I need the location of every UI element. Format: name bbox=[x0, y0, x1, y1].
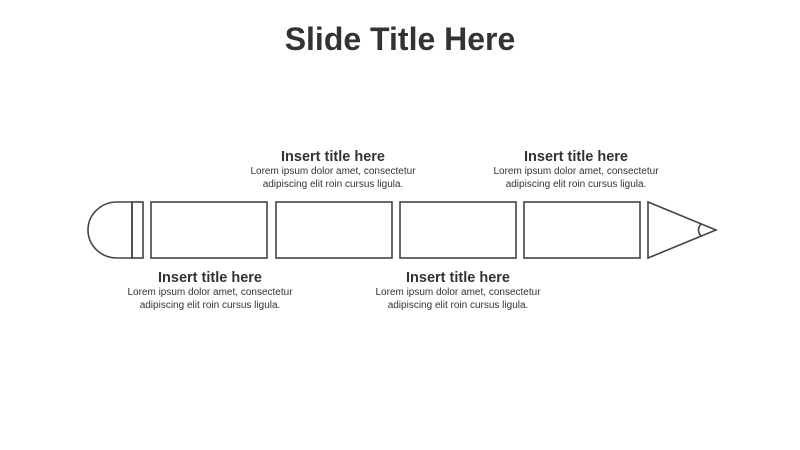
callout: top 2: Lorem ipsum dolor amet, consectetur bbox=[493, 166, 659, 177]
pencil body segments bbox=[151, 202, 640, 258]
callout: bottom 2: adipiscing elit roin cursus ligula. bbox=[388, 300, 528, 310]
callout: bottom 2: Insert title here bbox=[406, 270, 510, 286]
callout: top 2: adipiscing elit roin cursus ligula. bbox=[506, 178, 646, 190]
callout: top 2: Insert title here bbox=[524, 149, 628, 165]
callout: bottom 1 bbox=[127, 270, 293, 310]
callout: top 1: adipiscing elit roin cursus ligula. bbox=[263, 178, 403, 190]
callout: top 1: Insert title here bbox=[281, 149, 385, 165]
callout: bottom 1: Lorem ipsum dolor amet, consectetur bbox=[127, 287, 293, 298]
callout: bottom 2 bbox=[375, 270, 541, 310]
callout: top 2 bbox=[493, 149, 659, 190]
icon: pencil tip bbox=[648, 202, 716, 258]
callout: bottom 1: Insert title here bbox=[158, 270, 262, 286]
callout: top 1: Lorem ipsum dolor amet, consectetur bbox=[250, 166, 416, 177]
title: Slide Title Here bbox=[285, 21, 515, 57]
callout: bottom 1: adipiscing elit roin cursus ligula. bbox=[140, 300, 280, 310]
callout: top 1 bbox=[250, 149, 416, 190]
icon: eraser bbox=[88, 202, 143, 258]
callout: bottom 2: Lorem ipsum dolor amet, consectetur bbox=[375, 287, 541, 298]
